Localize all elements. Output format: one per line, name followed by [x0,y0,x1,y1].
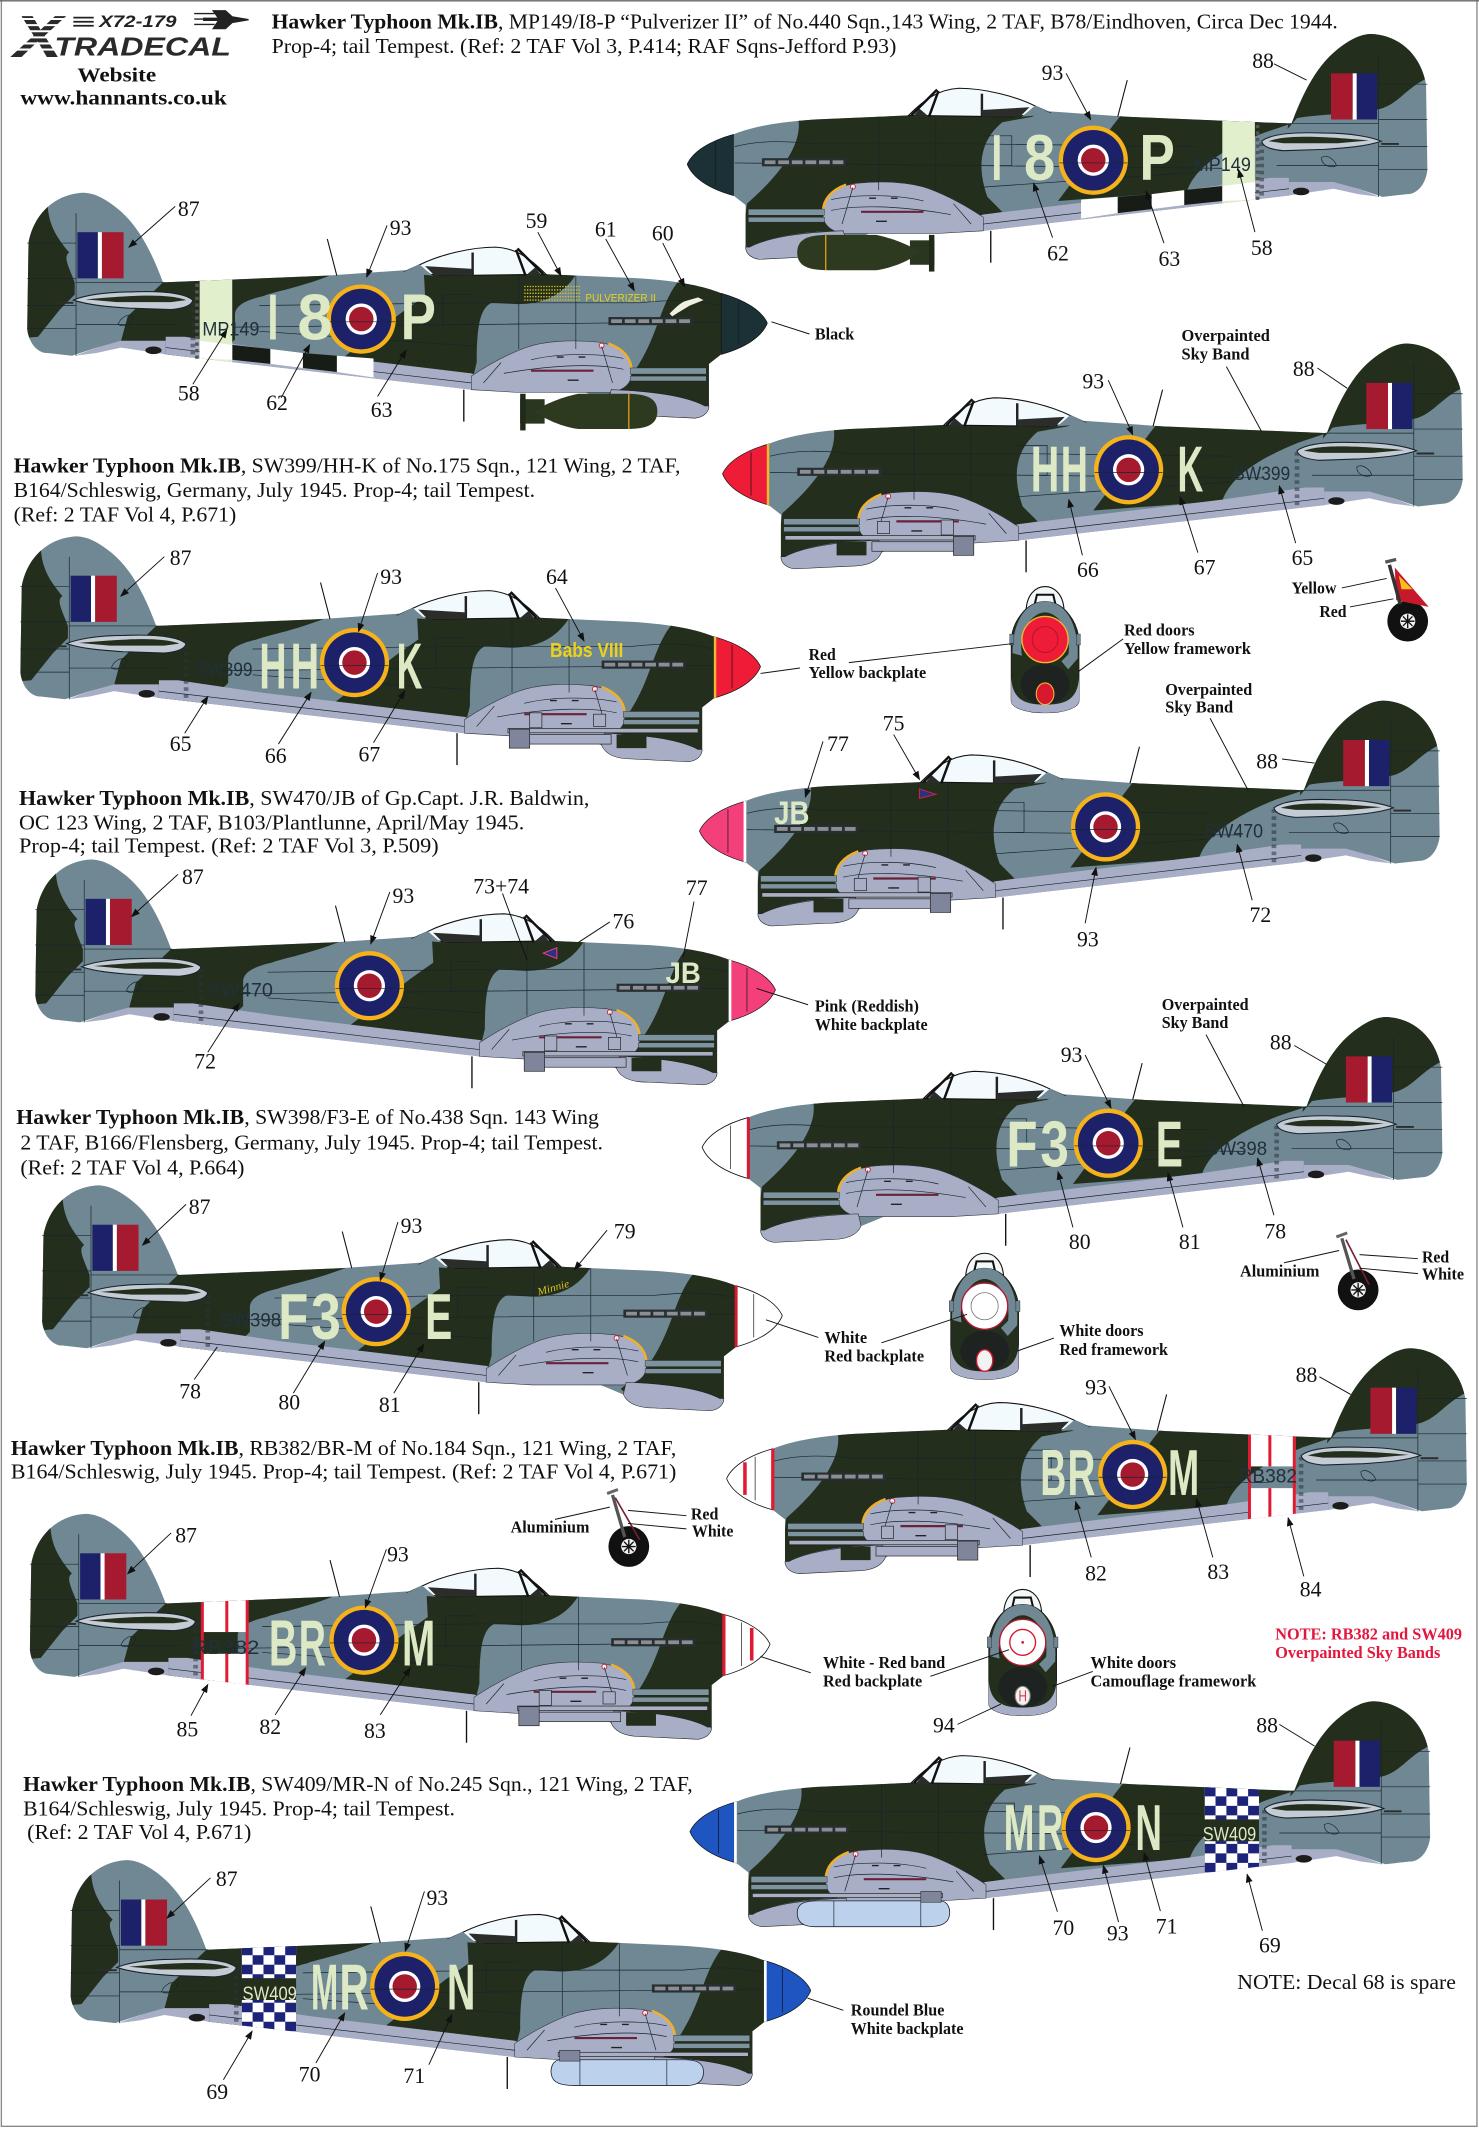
serial: SW409 [243,1983,297,2005]
callouts: 83 [364,1719,386,1743]
callouts: 87 [178,197,200,221]
code letters: JB [774,794,809,831]
callouts: 87 [170,546,192,570]
plane 5: SW470 starboard [699,680,1441,951]
logo: Xtradecal: X [10,3,66,70]
front view 3: white doors with red band [823,1589,1257,1716]
logo: Xtradecal: X72-179 [98,12,177,31]
callouts: 93 [1082,369,1104,393]
logo: Xtradecal: www.hannants.co.uk [20,88,227,110]
callouts: 81 [379,1393,401,1417]
caption: SW399: B164/Schleswig, Germany, July 1945. Prop-4; tail Tempest. [14,478,535,502]
code letters: P [1139,121,1175,194]
code letters: M [1168,1436,1199,1509]
front view 3: white doors with red band: Camouflage framework [1091,1671,1257,1690]
callouts: 66 [265,744,287,768]
callouts: White backplate [815,1015,928,1034]
callouts: 75 [883,711,905,735]
serial: SW399 [196,659,253,681]
callouts: 88 [1296,1363,1318,1387]
callouts: 88 [1256,750,1278,774]
plane 3: SW399 starboard [723,326,1464,582]
front view 1: red doors: Yellow framework [1124,639,1251,658]
callouts: 63 [371,398,393,422]
callouts: 82 [1085,1561,1107,1585]
landing gear detail 2: White [1422,1265,1464,1284]
callouts: 87 [175,1523,197,1547]
callouts: 88 [1256,1714,1278,1738]
serial: SW398 [220,1310,281,1332]
callouts: 58 [1251,236,1273,260]
callouts: 67 [359,743,380,767]
code letters [1006,1107,1183,1180]
code letters: R [1067,1436,1095,1509]
code letters [1040,1436,1199,1509]
plane 8: SW398 port [38,1185,782,1417]
landing gear detail 1: Red [1319,602,1347,621]
caption: RB382: Hawker Typhoon Mk.IB , RB382/BR-M of No.184 Sqn., 121 Wing, 2 TAF, [11,1436,676,1460]
callouts [1034,49,1307,271]
callouts: Overpainted [1162,995,1249,1014]
code letters: R [340,1951,369,2024]
front view 2: white doors [766,1253,1169,1380]
callouts: 80 [278,1390,300,1414]
front view 1: red doors: Yellow backplate [809,663,927,682]
callouts: 81 [1179,1230,1201,1254]
aircraft drawing [702,1010,1444,1246]
callouts [805,680,1315,951]
pilot marking [919,789,936,798]
caption: SW470: Prop-4; tail Tempest. (Ref: 2 TAF Vol 3, P.509) [19,834,439,858]
callouts [129,197,855,422]
caption: SW409: Hawker Typhoon Mk.IB , SW409/MR-N of No.245 Sqn., 121 Wing, 2 TAF, [23,1772,693,1796]
callouts: 64 [546,565,568,589]
callouts: 88 [1252,49,1274,73]
caption: SW399 [14,454,680,526]
callouts: 94 [933,1714,955,1738]
callouts: 71 [1156,1914,1177,1938]
code letters: M [402,1607,435,1680]
callouts: 93 [1061,1043,1083,1067]
front view 3: white doors with red band: White - Red band [823,1653,946,1672]
code letters [269,1607,435,1680]
landing gear detail 2 [1240,1233,1464,1310]
landing gear detail 2: Red [1422,1248,1450,1267]
code letters: R [1037,1791,1063,1864]
note: decal 68 spare: NOTE: Decal 68 is spare [1237,1970,1456,1994]
pilot marking [543,948,557,959]
callouts: 80 [1069,1230,1091,1254]
caption: SW398: Hawker Typhoon Mk.IB , SW398/F3-E of No.438 Sqn. 143 Wing [16,1105,599,1129]
callouts: 65 [1292,546,1313,570]
caption: SW409: B164/Schleswig, July 1945. Prop-4; tail Tempest. [23,1796,455,1820]
code letters [311,1951,475,2024]
code letters: H [259,629,287,702]
code letters [991,121,1175,194]
callouts: 65 [170,732,192,756]
code letters: 8 [1024,121,1055,194]
caption: SW399: (Ref: 2 TAF Vol 4, P.671) [14,502,236,526]
callouts: 77 [827,732,849,756]
code letters: N [1135,1791,1162,1864]
callouts: Black [815,324,855,343]
serial: RB382 [191,1637,259,1659]
code letters [278,1280,452,1353]
landing gear detail 1 [1292,559,1429,642]
callouts [121,546,584,768]
serial: RB382 [1239,1466,1297,1488]
nose art: Pulverizer [524,286,704,316]
callouts: 85 [177,1718,198,1742]
landing gear detail 2: Aluminium [1240,1261,1319,1280]
aircraft drawing [727,1341,1468,1577]
note: overpainted sky bands: Overpainted Sky Bands [1275,1643,1441,1662]
serial: MP149 [1194,154,1251,176]
nose art: Babs VIII: Babs VIII [550,640,623,662]
code letters: H [291,629,319,702]
code letters: 3 [1040,1107,1069,1180]
front view 3: white doors with red band: Red backplate [823,1671,923,1690]
callouts: 72 [194,1050,216,1074]
callouts [1076,1363,1351,1602]
plane 12: SW409 port [67,1860,964,2104]
code letters: B [269,1607,297,1680]
code letters: I [268,280,278,353]
callouts: 87 [189,1195,211,1219]
callouts: 62 [266,391,288,415]
code letters: E [1156,1107,1183,1180]
logo: Xtradecal: Website [77,64,156,86]
note: overpainted sky bands: NOTE: RB382 and SW409 [1275,1625,1462,1644]
front view 2: white doors: White doors [1059,1321,1144,1340]
caption: SW409: (Ref: 2 TAF Vol 4, P.671) [27,1820,251,1844]
code letters: F [1006,1107,1038,1180]
plane 6: SW470 port [31,859,928,1090]
logo: Xtradecal [8,3,249,110]
callouts: 93 [1107,1921,1129,1945]
callouts: Sky Band [1162,1013,1229,1032]
landing gear detail 3 [511,1489,734,1567]
aircraft drawing [31,859,775,1090]
aircraft drawing [723,337,1464,572]
callouts: 93 [380,565,402,589]
plane 10: RB382 port [26,1514,811,1745]
callouts: Pink (Reddish) [815,997,919,1016]
serial: SW470 [1205,821,1263,843]
serial: SW470 [208,980,273,1002]
code letters [1031,433,1203,506]
nose art: Minnie: Minnie [535,1278,571,1299]
callouts [167,1867,964,2104]
serial: SW398 [1206,1138,1267,1160]
front view 1: red doors: Red [809,645,836,664]
aircraft drawing [687,27,1429,272]
aircraft drawing [38,1185,782,1416]
note: overpainted sky bands [1275,1625,1462,1662]
caption: SW398: (Ref: 2 TAF Vol 4, P.664) [20,1155,244,1179]
caption: MP149 [272,10,1338,58]
callouts: 63 [1158,247,1180,271]
caption: SW470: Hawker Typhoon Mk.IB , SW470/JB of Gp.Capt. J.R. Baldwin, [19,786,589,810]
callouts [1058,995,1327,1254]
callouts: 79 [614,1219,636,1243]
callouts: 72 [1249,903,1271,927]
callouts: 58 [178,382,200,406]
plane 7: SW398 starboard [702,995,1444,1254]
caption: RB382: B164/Schleswig, July 1945. Prop-4; tail Tempest. (Ref: 2 TAF Vol 4, P.671) [11,1460,676,1484]
aircraft drawing [67,1860,811,2091]
callouts: 93 [387,1542,409,1566]
callouts: 76 [613,910,634,934]
callouts: 78 [179,1380,201,1404]
aircraft drawing [26,1514,770,1745]
aircraft drawing [23,193,767,430]
serial: MP149 [202,318,259,340]
callouts: 73+74 [473,874,529,898]
front view 1: red doors: Red doors [1124,620,1195,639]
callouts: 71 [403,2064,425,2088]
callouts: Overpainted [1165,680,1253,699]
callouts: 78 [1264,1219,1286,1243]
code letters: F [278,1280,308,1353]
caption: RB382 [11,1436,676,1484]
caption: MP149: Hawker Typhoon Mk.IB , MP149/I8-P “Pulverizer II” of No.440 Sqn.,143 Wing, 2 TAF, B78/Eindhoven, Circa Dec 1944. [272,10,1338,34]
code letters: B [1040,1436,1066,1509]
front view 3: white doors with red band: White doors [1091,1653,1177,1672]
front view 2: white doors: Red framework [1059,1340,1169,1359]
callouts: 60 [652,221,674,245]
code letters: 8 [297,280,333,353]
serial: SW409 [1203,1823,1256,1845]
caption: SW470: OC 123 Wing, 2 TAF, B103/Plantlunne, April/May 1945. [19,811,524,835]
callouts: 84 [1300,1578,1322,1602]
front view 2: white doors: Red backplate [824,1346,925,1365]
callouts: Roundel Blue [851,2001,945,2020]
callouts: 83 [1207,1560,1229,1584]
callouts: 82 [259,1715,281,1739]
code letters: K [397,629,422,702]
code letters: M [311,1951,338,2024]
callouts: 62 [1047,242,1069,266]
code letters [268,280,436,353]
callouts: 93 [393,884,414,908]
aircraft drawing [690,1695,1431,1930]
code letters: R [299,1607,326,1680]
plane 1: MP149 starboard [687,27,1429,272]
callouts: 69 [206,2080,228,2104]
callouts: 88 [1270,1031,1292,1055]
code letters: K [1177,433,1203,506]
plane 2: MP149 port [23,193,855,430]
serial: SW399 [1233,463,1290,485]
code letters: N [447,1951,475,2024]
code letters: JB [665,957,701,990]
callouts: 93 [401,1214,423,1238]
callouts: 69 [1259,1933,1281,1957]
front view 1: red doors [761,587,1251,713]
callouts: 87 [216,1867,238,1891]
plane 9: RB382 starboard [727,1341,1468,1602]
nose art: Pulverizer: PULVERIZER II [585,292,656,304]
callouts: 93 [1077,927,1099,951]
caption: SW409 [23,1772,693,1844]
code letters [259,629,422,702]
callouts: 93 [426,1886,448,1910]
plane 4: SW399 port [16,536,761,768]
code letters: H [1061,433,1088,506]
caption: SW398: 2 TAF, B166/Flensberg, Germany, July 1945. Prop-4; tail Tempest. [20,1130,603,1154]
callouts: 67 [1194,555,1216,579]
caption: SW399: Hawker Typhoon Mk.IB , SW399/HH-K of No.175 Sqn., 121 Wing, 2 TAF, [14,454,680,478]
aircraft drawing [699,694,1441,929]
callouts [933,1704,1315,1957]
callouts: 93 [390,216,412,240]
callouts: 87 [182,865,204,889]
callouts [143,1195,636,1417]
code letters: I [991,121,1002,194]
callouts: 93 [1042,61,1064,85]
callouts [132,865,928,1074]
code letters [1004,1791,1162,1864]
callouts: 93 [1085,1375,1107,1399]
callouts: 66 [1077,558,1099,582]
callouts: 77 [686,876,708,900]
code letters: E [425,1280,452,1353]
callouts: 70 [299,2062,321,2086]
callouts: 70 [1053,1916,1074,1940]
callouts: Sky Band [1182,344,1250,363]
landing gear detail 1: Yellow [1292,578,1337,597]
callouts [1069,326,1347,582]
code letters: 3 [311,1280,341,1353]
aircraft drawing [16,536,761,767]
callouts: Overpainted [1182,326,1270,345]
landing gear detail 3: White [692,1521,734,1540]
caption: MP149: Prop-4; tail Tempest. (Ref: 2 TAF Vol 3, P.414; RAF Sqns-Jefford P.93) [272,34,896,58]
logo: Xtradecal: TRADECAL [54,34,231,62]
code letters: H [1031,433,1059,506]
callouts: 59 [526,209,547,233]
caption: SW398 [16,1105,603,1179]
landing gear detail 3: Aluminium [511,1517,589,1536]
callouts: 88 [1293,357,1315,381]
front view 2: white doors: White [824,1328,868,1347]
callouts: Sky Band [1165,697,1234,716]
landing gear detail 3: Red [691,1504,719,1523]
plane 11: SW409 starboard [690,1695,1431,1957]
code letters: M [1004,1791,1034,1864]
callouts [128,1523,811,1743]
callouts: 61 [595,217,617,241]
caption: SW470 [19,786,589,858]
callouts: White backplate [851,2019,964,2038]
code letters: P [401,280,436,353]
